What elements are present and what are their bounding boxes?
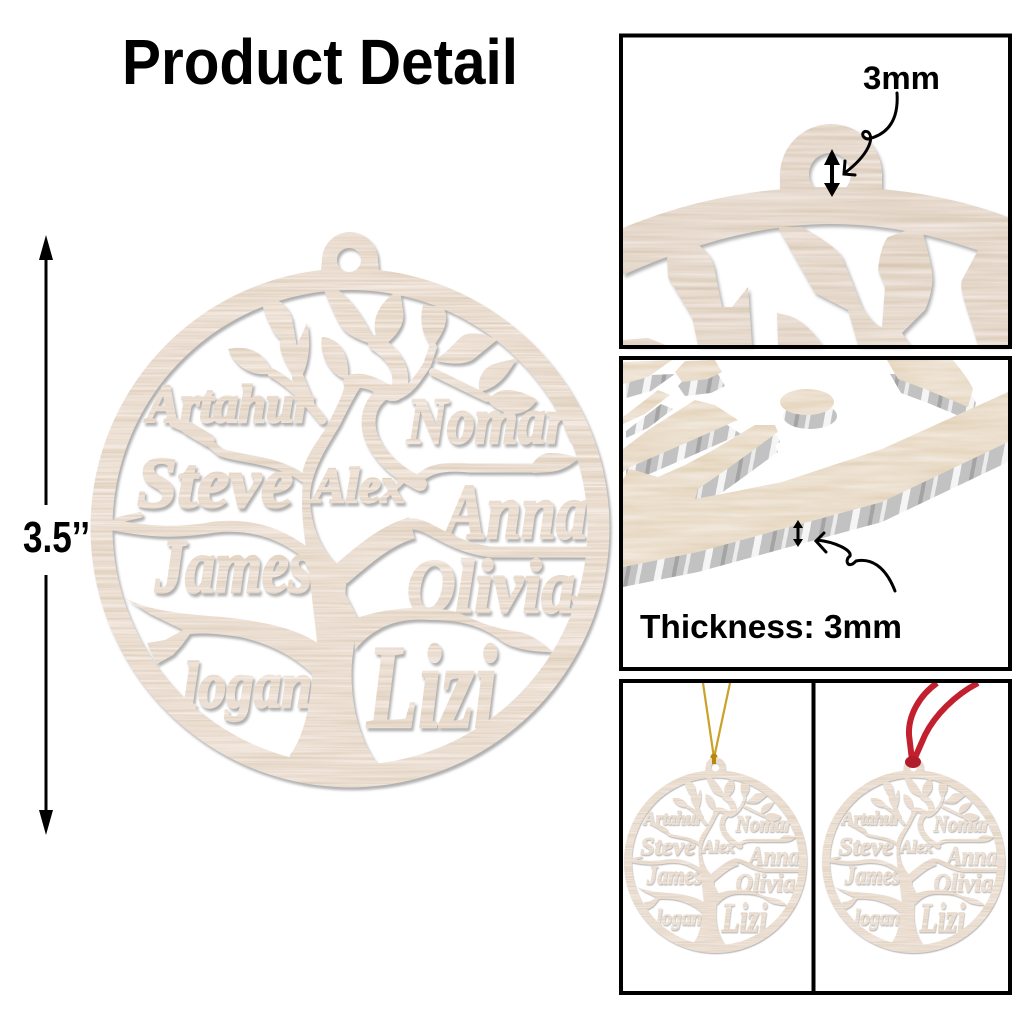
panel: hanging options [621,681,1010,993]
label: 3mm: 3mm [863,60,940,96]
small ornament: red ribbon: Artahur [841,808,901,829]
small ornament: red ribbon: Olivia [934,867,993,897]
small ornament: gold string: Nomar [735,812,793,838]
small ornament: red ribbon: logan [855,905,900,931]
title: Product Detail [122,26,518,98]
gold string knot [712,755,716,764]
zoomed ornament top with hanger, ring and leaves [623,124,1008,345]
small ornament: red ribbon: Nomar [933,812,991,838]
small ornament: red ribbon: Alex [899,837,933,857]
acrylic edge layer [623,374,1010,587]
panel: hole size detail [621,36,1010,347]
small ornament: red ribbon: Anna [945,840,997,871]
name: Lizi: Lizi [366,620,497,753]
arrow: double-headed hole measure [824,149,840,197]
small ornament: gold string: Alex [701,837,735,857]
small ornament: gold string: Olivia [736,867,795,897]
small ornament: red ribbon: Lizi [919,895,966,942]
small ornament: gold string [624,757,807,953]
name: Artahur: Artahur [144,374,314,434]
name: logan: logan [183,649,312,722]
name: Nomar: Nomar [406,385,568,458]
main ornament: family tree with names [90,232,609,787]
gold string [703,683,730,758]
frame [621,358,1010,669]
name: Anna: Anna [441,468,587,555]
panel: thickness detail [621,358,1010,669]
frame with divider [621,681,1010,993]
gold knot [710,754,718,760]
red ribbon knot [905,756,921,768]
name: Alex: Alex [310,457,405,513]
small ornament: gold string: Lizi [721,895,768,942]
small ornament: gold string: Artahur [643,808,703,829]
small ornament: gold string: Steve [640,832,695,860]
dimension arrow: 3.5 inch height: 3.5’’ [23,513,90,562]
name: Olivia: Olivia [407,545,575,629]
arrow: curved pointer to hole [844,93,897,175]
small ornament: red ribbon: Steve [838,832,893,860]
arrow: curved pointer to edge [816,533,895,591]
small ornament: gold string: logan [657,905,702,931]
name: James: James [154,525,312,609]
small ornament: red ribbon: James [844,860,900,890]
frame [621,36,1010,347]
arrow: small thickness measure [793,520,803,547]
small ornament: gold string: Anna [747,840,799,871]
name: Steve: Steve [137,443,293,523]
small ornament: red ribbon [822,757,1005,953]
label: thickness: Thickness: 3mm [640,608,902,645]
wood top surface [623,360,1008,567]
small ornament: gold string: James [646,860,702,890]
dimension arrow: 3.5 inch height [23,235,90,835]
red ribbon [909,683,978,760]
